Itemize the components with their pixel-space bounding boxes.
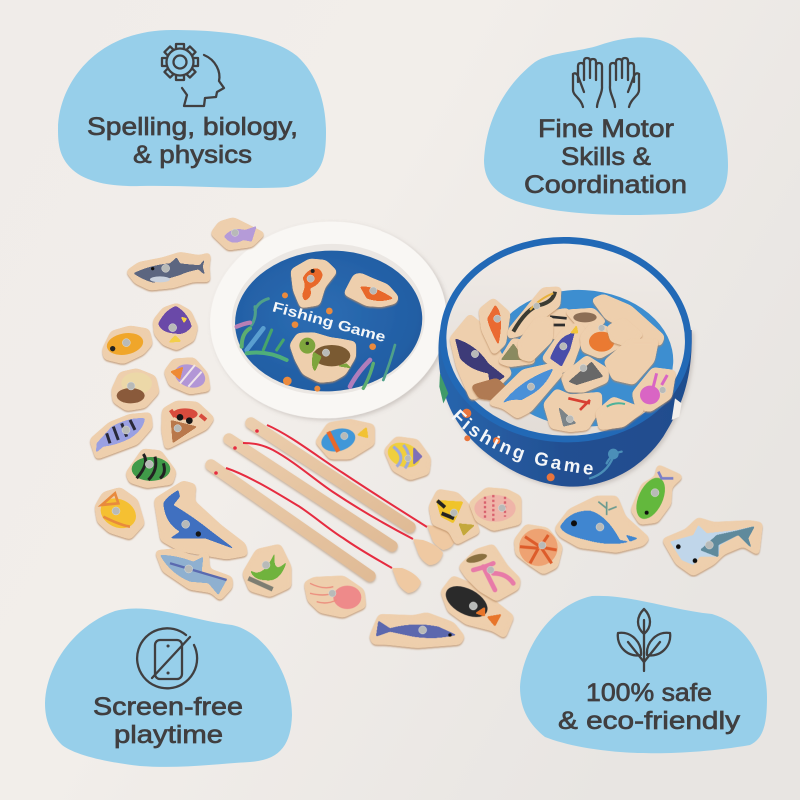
plain large piece: [606, 341, 657, 383]
box sticker: [672, 398, 682, 420]
whale piece: [557, 498, 647, 551]
octopus piece: [634, 369, 674, 410]
left arc of wooden fish: [92, 254, 246, 598]
black fish piece: [441, 578, 512, 636]
tuna piece: [452, 316, 510, 398]
right group of wooden fish: [516, 467, 761, 574]
panel: screen-free playtime: [45, 609, 292, 767]
box title curve: [451, 417, 593, 475]
jellyfish piece: [306, 578, 364, 616]
swordfish piece: [156, 483, 246, 557]
silver fish piece: [157, 551, 231, 598]
seaweed piece: [244, 546, 289, 595]
lid turtle piece: [292, 334, 354, 381]
brown back piece: [567, 310, 604, 330]
plain bean piece: [519, 319, 552, 360]
blob background: [484, 37, 728, 215]
panel: spelling, biology and physics: [58, 30, 326, 188]
nautilus piece: [516, 526, 561, 572]
heading: safe: 100% safe: [586, 679, 712, 707]
small fish grey: [500, 340, 533, 365]
wooden pieces pile: [452, 289, 674, 430]
orange fish piece: [582, 323, 620, 357]
box print: [439, 373, 622, 481]
heading: screen-free: playtime: [114, 721, 223, 749]
blue tang piece: [544, 324, 584, 372]
lid orange fish piece: [346, 275, 397, 305]
hammerhead shark piece: [664, 519, 761, 574]
heading: fine motor: Skills &: [561, 143, 651, 171]
rod two: [229, 439, 443, 565]
pearl shell piece: [113, 370, 157, 409]
lid starfish: [282, 292, 376, 392]
green striped fish piece: [128, 451, 174, 486]
rod three: [211, 465, 421, 593]
box inner wall and rim: [440, 236, 692, 443]
blue striped fish piece: [92, 414, 151, 457]
icon: gear and head: [162, 44, 224, 106]
blob background: [520, 596, 767, 753]
lid seaweed: [237, 299, 395, 388]
heading: screen-free: Screen-free: [93, 693, 243, 721]
pink fish piece: [471, 489, 519, 529]
heading: safe: & eco-friendly: [558, 707, 741, 735]
rod one: [251, 423, 455, 550]
yellow striped fish piece: [384, 438, 429, 478]
open box with wooden fish: [438, 237, 696, 490]
plain shell piece: [594, 296, 663, 344]
heading: fine motor: Coordination: [524, 171, 687, 199]
crab and grey fish pieces: [545, 391, 600, 430]
icon: leaf sprout: [618, 609, 670, 671]
blob background: [58, 30, 326, 188]
orange ribbon piece: [481, 300, 508, 353]
blob background: [45, 609, 292, 767]
blue tropical fish piece: [317, 421, 373, 457]
heading: fine motor: Fine Motor: [538, 115, 674, 143]
pink coral piece: [461, 546, 519, 599]
fishing rods: [211, 423, 455, 593]
heading: spelling: & physics: [133, 141, 252, 169]
panel: fine motor skills: [484, 37, 728, 215]
icon: open hands: [573, 58, 639, 107]
purple spade fish piece: [155, 305, 196, 348]
plain oval piece: [609, 319, 641, 345]
stingray piece: [563, 357, 607, 391]
shark piece: [128, 254, 209, 288]
heading: spelling: Spelling, biology,: [87, 113, 298, 141]
eel piece: [509, 289, 559, 337]
box inner floor: [487, 285, 677, 431]
green parrotfish piece: [630, 467, 681, 523]
teal back piece: [597, 399, 643, 428]
panel: safe and eco-friendly: [520, 596, 767, 753]
center and lower wooden fish: [244, 421, 519, 646]
lid title: Fishing Game: [271, 299, 387, 346]
yellow fish piece: [96, 489, 143, 537]
dark lower piece: [473, 380, 507, 398]
striped fish piece: [166, 359, 208, 392]
icon: no phone: [137, 628, 197, 688]
crab piece: [163, 403, 212, 447]
orange fish piece: [104, 328, 151, 362]
black and yellow fish piece: [431, 491, 478, 543]
lid ocean print: [231, 246, 426, 396]
purple fish piece: [213, 219, 263, 248]
long fish piece: [371, 614, 463, 646]
lid with fishing game print: [203, 214, 453, 426]
lid seahorse piece: [293, 261, 335, 306]
dolphin piece: [491, 365, 561, 417]
lid ring: [203, 214, 453, 426]
stripe piece behind: [548, 310, 577, 340]
box title: Fishing Game: [452, 409, 593, 474]
box body: [438, 330, 692, 487]
